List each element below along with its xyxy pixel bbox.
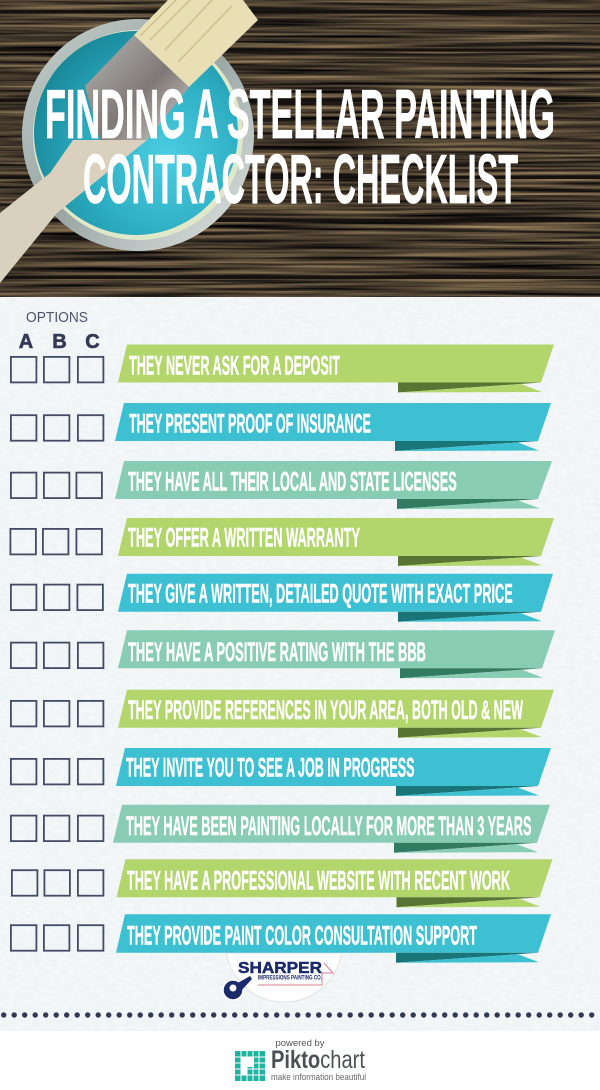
row 6 (11, 630, 555, 678)
checkboxes (11, 759, 103, 784)
icon: Piktochart logo (235, 1051, 265, 1081)
row 5 (11, 574, 553, 622)
checkboxes (11, 415, 103, 441)
column letters: A (19, 331, 33, 353)
ribbon (115, 403, 551, 451)
logo tagline: IMPRESSIONS PAINTING CO. (258, 976, 322, 982)
checkboxes (11, 643, 103, 668)
ribbon (113, 805, 550, 853)
Piktochart wordmark: Piktochart (271, 1046, 365, 1074)
ribbon (118, 344, 554, 392)
ribbon (116, 859, 552, 907)
ribbon (116, 914, 551, 963)
row 3 (11, 461, 552, 509)
checkboxes (11, 357, 103, 382)
row 10 (12, 859, 552, 907)
icon: brush handle (0, 140, 147, 283)
row 7 (11, 690, 554, 738)
ribbon (118, 690, 554, 738)
dotted divider (1, 1012, 594, 1018)
logo roof line (258, 963, 333, 985)
row 4 (10, 518, 554, 566)
column letters (19, 331, 100, 353)
logo mascot (223, 976, 252, 1000)
row 2 (11, 403, 551, 451)
title (45, 75, 555, 218)
powered by label: powered by (275, 1038, 325, 1049)
ribbon (118, 574, 553, 622)
row 1 (11, 344, 554, 392)
checkboxes (11, 473, 102, 498)
ribbon (118, 518, 554, 566)
row 9 (11, 805, 550, 853)
header photo: paint can and brush on wood (0, 0, 600, 297)
tagline: make information beautiful (271, 1072, 366, 1083)
column letters: B (52, 331, 67, 353)
checkboxes (11, 816, 103, 841)
icon: brush bristles (134, 0, 258, 87)
checkboxes (11, 925, 103, 951)
checklist panel background (0, 297, 600, 1031)
options heading: OPTIONS (26, 310, 88, 326)
logo wordmark: SHARPER (238, 960, 322, 977)
footer: powered by Piktochart (0, 1031, 600, 1090)
icon: brush ferrule (85, 35, 189, 140)
icon: paint can (22, 19, 254, 251)
checkboxes (12, 870, 103, 896)
ribbon (116, 748, 551, 796)
row 11 (11, 914, 551, 963)
checkboxes (10, 529, 102, 554)
column letters: C (85, 331, 100, 353)
ribbon (118, 630, 555, 678)
ribbon: THEY NEVER ASK FOR A DEPOSIT (129, 350, 340, 380)
checkboxes (11, 701, 103, 726)
checkboxes (11, 585, 103, 610)
logo badge (223, 953, 341, 1002)
row 8 (11, 748, 551, 796)
ribbon (115, 461, 552, 509)
